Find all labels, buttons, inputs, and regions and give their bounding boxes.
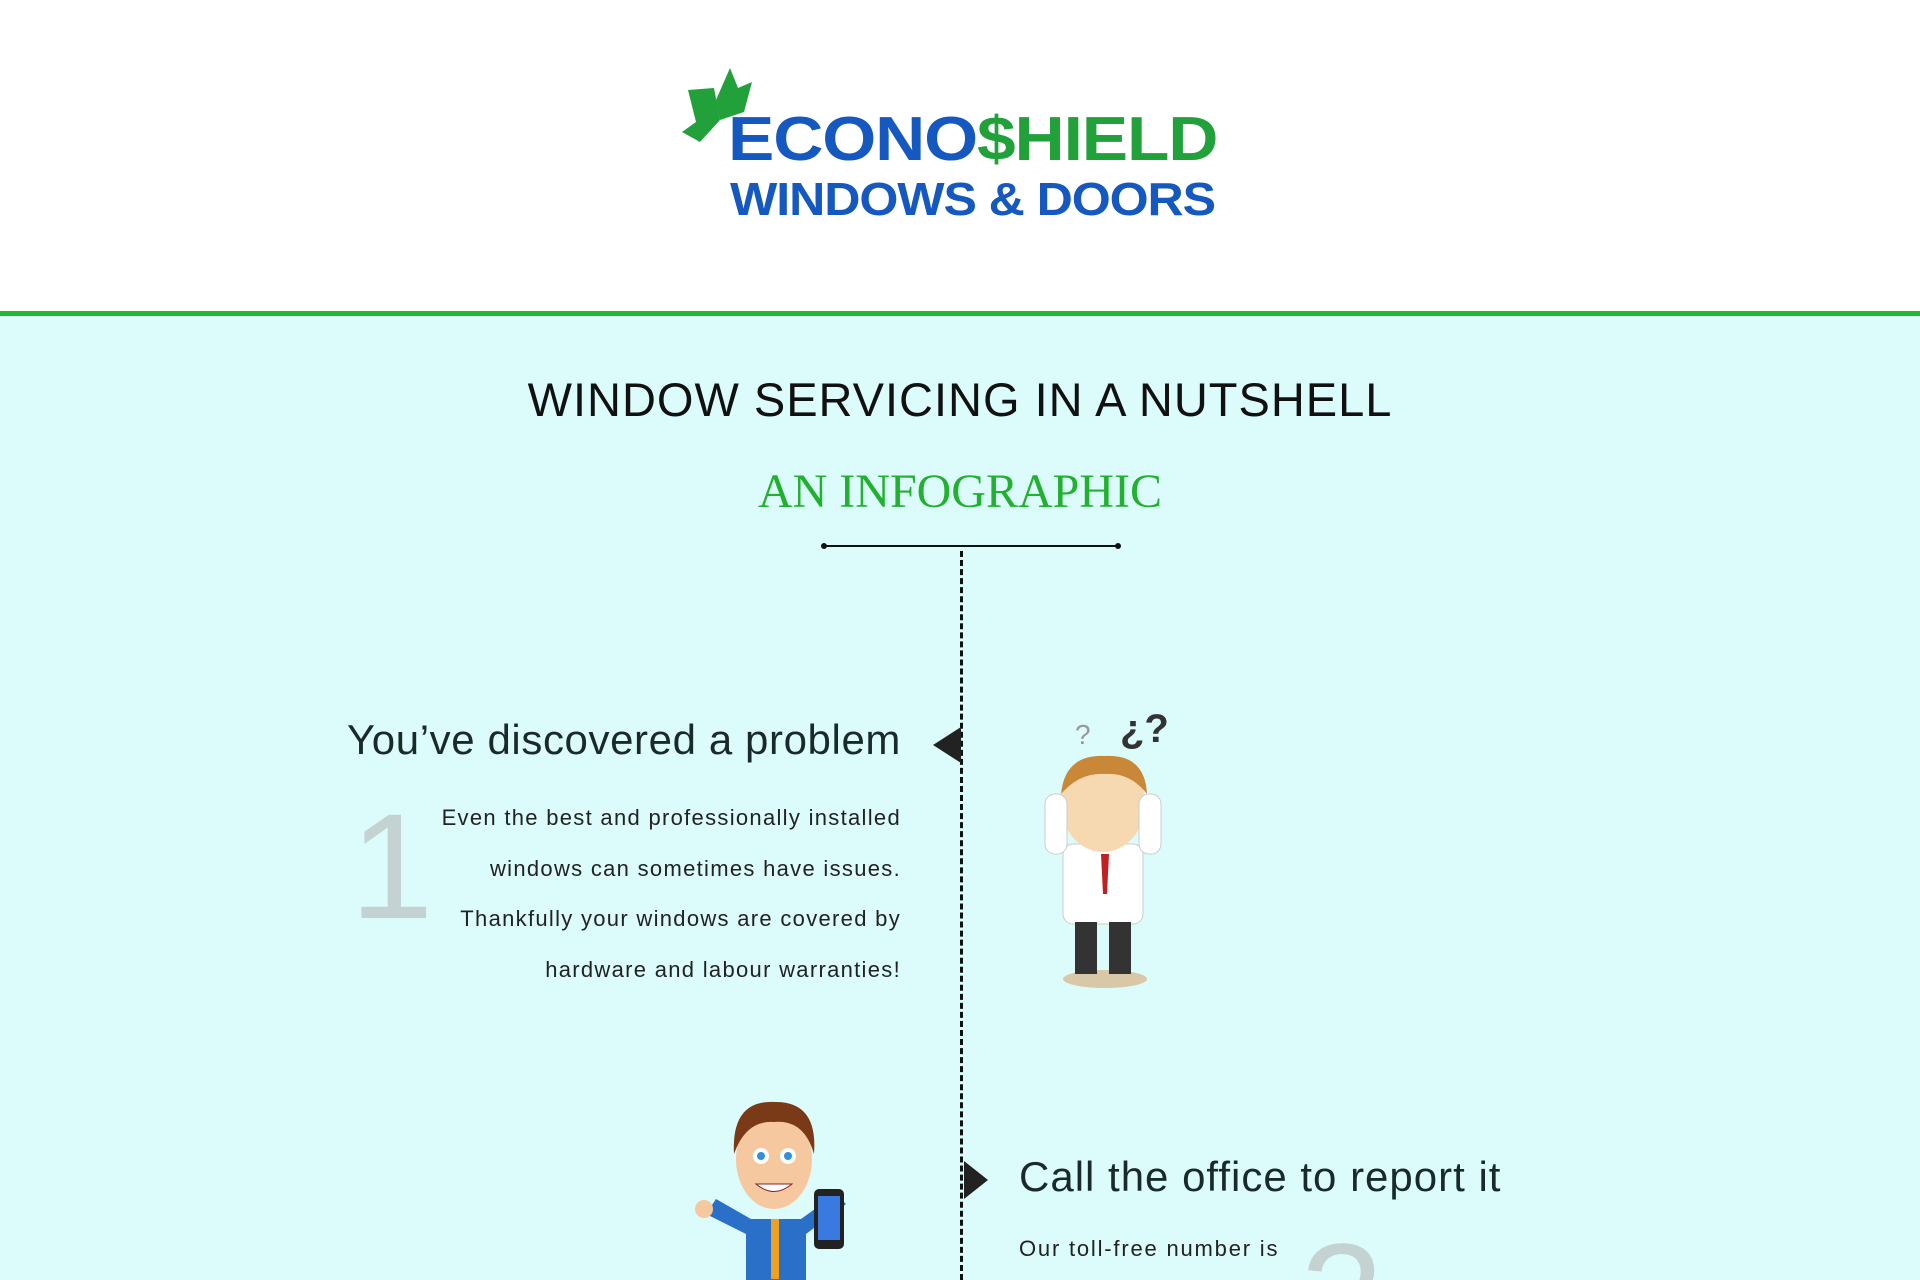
icon: man with phone [695, 1102, 846, 1280]
step 1 body: Thankfully your windows are covered by [460, 906, 901, 931]
step 2 heading: Call the office to report it [1019, 1153, 1501, 1200]
icon: leaves [682, 68, 752, 142]
icon: confused man [1044, 707, 1169, 988]
green divider [0, 311, 1920, 316]
step 2 arrow [964, 1161, 988, 1199]
step 1 heading: You’ve discovered a problem [347, 716, 901, 763]
title: WINDOW SERVICING IN A NUTSHELL [528, 373, 1392, 426]
step 2 body: Our toll-free number is [1019, 1236, 1279, 1261]
step 1 number: 1 [350, 782, 433, 950]
step 1 body: hardware and labour warranties! [545, 956, 901, 982]
header: logo [682, 68, 1217, 225]
main panel background [0, 316, 1920, 1280]
divider with dots [821, 543, 1121, 549]
icon: confused man: ? [1075, 719, 1091, 750]
logo text WINDOWS & DOORS: WINDOWS & DOORS [730, 173, 1215, 225]
step 1 body [442, 805, 901, 982]
timeline dashed line [960, 551, 963, 1280]
subtitle: AN INFOGRAPHIC [758, 465, 1162, 518]
step 1 body: Even the best and professionally installed [442, 805, 901, 830]
logo text ECONOSHIELD: ECONO$HIELD [728, 105, 1217, 174]
step 1 body: windows can sometimes have issues. [490, 856, 901, 880]
step 1 arrow [933, 727, 961, 763]
icon: confused man: ¿? [1120, 707, 1169, 751]
